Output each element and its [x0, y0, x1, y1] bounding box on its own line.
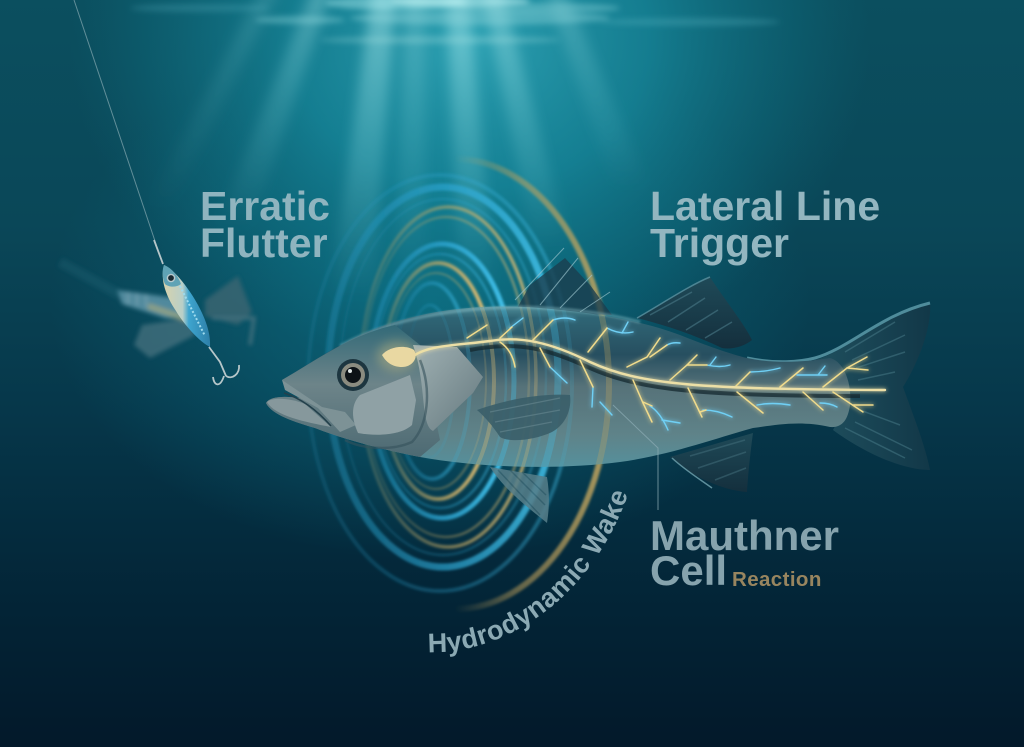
- lure ghost blur: [60, 262, 254, 358]
- label: Hydrodynamic Wake: Hydrodynamic Wake: [429, 491, 626, 657]
- yellow nerve branches: [467, 320, 873, 422]
- gill cover: [413, 345, 483, 431]
- Mauthner cell glow: [377, 341, 417, 371]
- label: Reaction: Reaction: [732, 568, 822, 591]
- label: Mauthner Cell: Mauthner: [650, 512, 839, 559]
- label: Mauthner Cell: Cell: [650, 547, 727, 594]
- hook and rings: [154, 240, 239, 384]
- fish: [266, 248, 930, 523]
- light rays from surface: [145, 0, 650, 300]
- main nerve trunk: [415, 339, 885, 390]
- cheek plate: [353, 375, 416, 435]
- label: Lateral Line Trigger: Lateral Line: [650, 183, 880, 229]
- head: [266, 325, 440, 457]
- label: Erratic Flutter: Erratic: [200, 183, 330, 229]
- fish body: [266, 307, 850, 467]
- leader line to Mauthner Cell: [613, 405, 658, 510]
- lure with motion blur ghosts: [60, 240, 254, 384]
- ventral fin: [490, 467, 549, 523]
- tail fin: [747, 303, 930, 470]
- eye: [337, 359, 369, 391]
- hydrodynamic wake rings (behind fish): [301, 159, 609, 609]
- lower jaw gap line: [284, 393, 331, 426]
- spiny dorsal fin: [515, 248, 612, 315]
- jaw: [267, 399, 331, 427]
- label: Lateral Line Trigger: Trigger: [650, 220, 789, 266]
- dark lateral groove: [470, 346, 860, 396]
- water surface shimmer: [130, 0, 780, 44]
- wake rings seen through fish: [376, 306, 612, 467]
- lure eye: [167, 274, 175, 282]
- back highlight: [340, 307, 640, 346]
- label: Erratic Flutter: Flutter: [200, 220, 328, 266]
- anal fin: [670, 433, 753, 492]
- pectoral fin: [477, 395, 570, 440]
- blue branch tips: [510, 318, 837, 430]
- fishing line: [74, 0, 158, 250]
- lateral line nerve branches: [415, 318, 885, 430]
- soft dorsal fin: [637, 277, 752, 349]
- lure body: [163, 265, 210, 347]
